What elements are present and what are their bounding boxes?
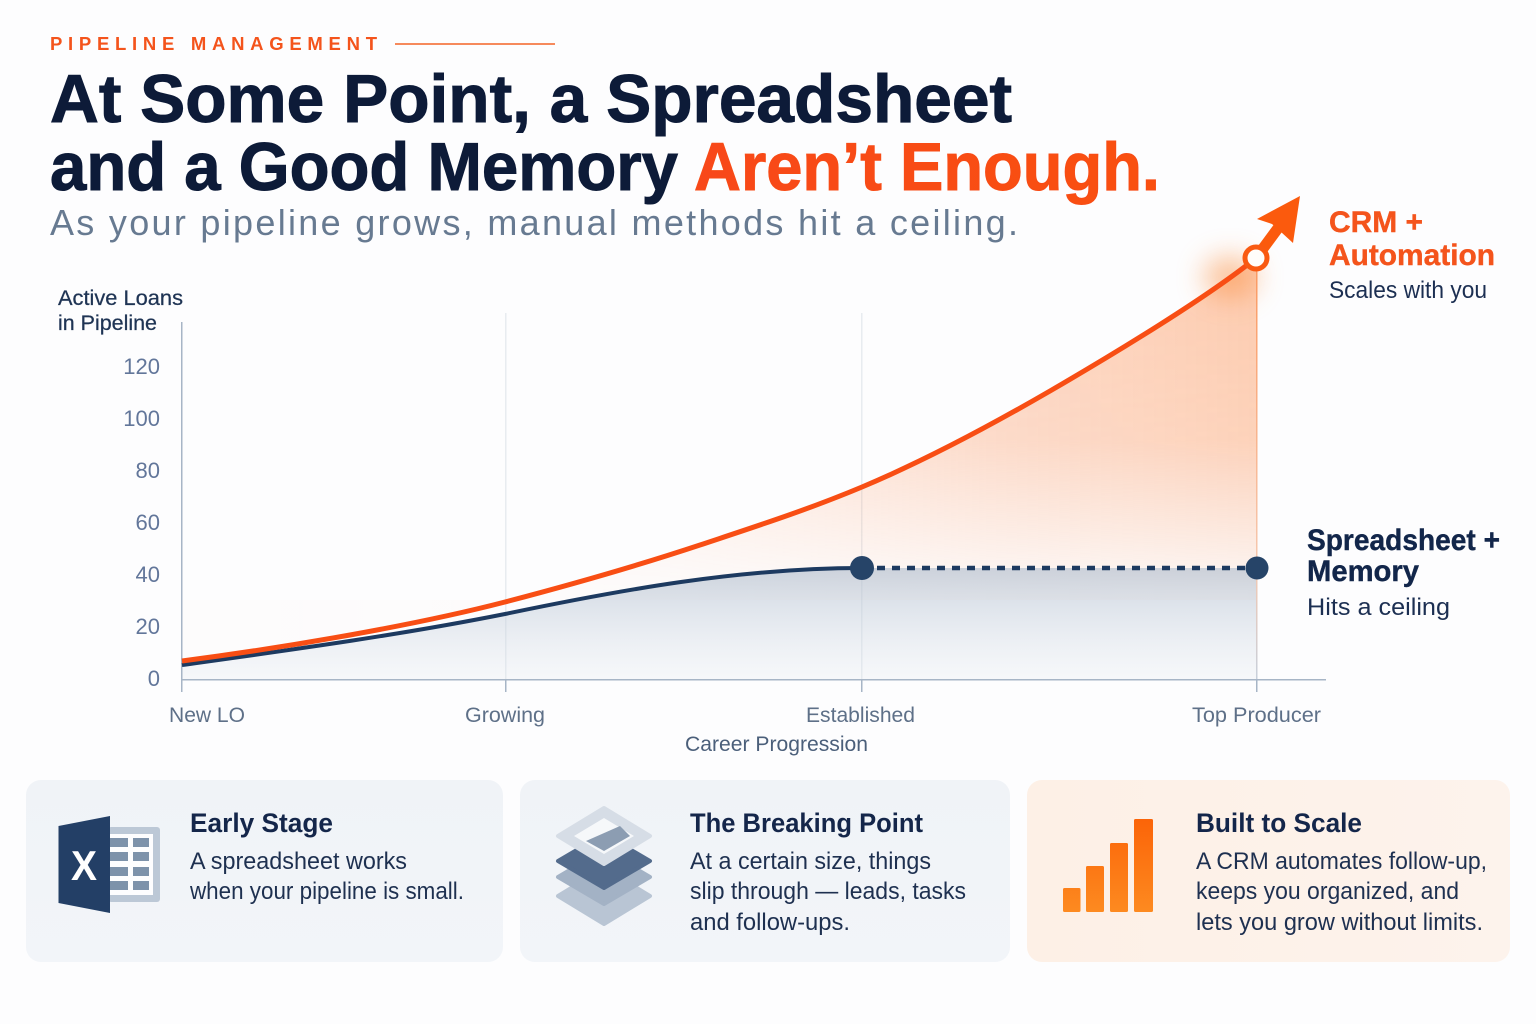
line chart (58, 196, 1326, 756)
y-axis labels: 0 (148, 666, 160, 691)
y-axis labels: 60 (136, 510, 160, 535)
card heading: The Breaking Point (690, 808, 923, 838)
panel: built to scale (1027, 780, 1510, 962)
label: CRM + Automation (1329, 206, 1495, 304)
orange line: CRM + automation (182, 258, 1256, 661)
title: and a Good Memory (50, 129, 678, 205)
navy line: spreadsheet + memory (182, 568, 862, 665)
x-axis labels: Established (806, 704, 915, 727)
dotted ceiling line (862, 566, 1256, 570)
x-axis labels (169, 704, 1321, 727)
navy area: spreadsheet plateau (182, 568, 1256, 680)
vertical grid lines (505, 313, 862, 680)
icon: spreadsheet (58, 816, 160, 913)
card text: lets you grow without limits. (1196, 909, 1483, 936)
card text: and follow-ups. (690, 909, 850, 936)
icon: layers (558, 808, 650, 924)
y-axis title: Active Loans (58, 287, 183, 310)
card heading: Built to Scale (1196, 808, 1362, 838)
label: Spreadsheet + Memory: Memory (1307, 555, 1419, 588)
eyebrow: pipeline management: PIPELINE MANAGEMENT (50, 33, 378, 54)
y-axis title (58, 287, 183, 335)
top producer guide line (1256, 270, 1258, 680)
arrow (1256, 196, 1300, 258)
end marker (1245, 247, 1267, 269)
x-axis labels: Growing (465, 704, 545, 727)
card text: A spreadsheet works (190, 848, 407, 875)
label: CRM + Automation: Automation (1329, 239, 1495, 272)
card text: when your pipeline is small. (189, 878, 464, 905)
x-axis labels: Top Producer (1192, 704, 1321, 727)
title (50, 61, 1160, 205)
card heading: Early Stage (190, 808, 333, 838)
glow behind marker (1204, 257, 1256, 297)
label: Spreadsheet + Memory (1307, 524, 1500, 621)
title: At Some Point, a Spreadsheet (50, 61, 1012, 137)
ceiling markers (850, 556, 1268, 580)
card text: At a certain size, things (690, 848, 931, 875)
card text (189, 848, 464, 905)
subtitle: As your pipeline grows, manual methods hit a ceiling. (50, 202, 1018, 243)
label: Spreadsheet + Memory: Spreadsheet + (1307, 524, 1500, 557)
y-axis labels: 100 (123, 406, 160, 431)
x-axis title: Career Progression (685, 733, 868, 756)
x-axis labels: New LO (169, 704, 245, 727)
card text: slip through — leads, tasks (690, 878, 966, 905)
y-axis labels (123, 354, 160, 691)
panel: early stage (26, 780, 503, 962)
title: Aren’t Enough. (694, 129, 1160, 205)
label: Spreadsheet + Memory: Hits a ceiling (1307, 594, 1450, 621)
label: CRM + Automation: CRM + (1329, 206, 1423, 239)
y-axis labels: 80 (136, 458, 160, 483)
y-axis labels: 120 (123, 354, 160, 379)
card text: A CRM automates follow-up, (1196, 848, 1487, 875)
axes (181, 322, 1326, 692)
orange area: CRM growth (670, 268, 1256, 571)
card text: keeps you organized, and (1196, 878, 1459, 905)
y-axis labels: 40 (136, 562, 160, 587)
label: CRM + Automation: Scales with you (1329, 277, 1487, 304)
panel: the breaking point (520, 780, 1010, 962)
card text (1196, 848, 1487, 936)
y-axis title: in Pipeline (58, 312, 157, 335)
icon: bar chart (1063, 819, 1153, 912)
icon: spreadsheet: X (71, 842, 97, 889)
card text (690, 848, 966, 936)
y-axis labels: 20 (136, 614, 160, 639)
